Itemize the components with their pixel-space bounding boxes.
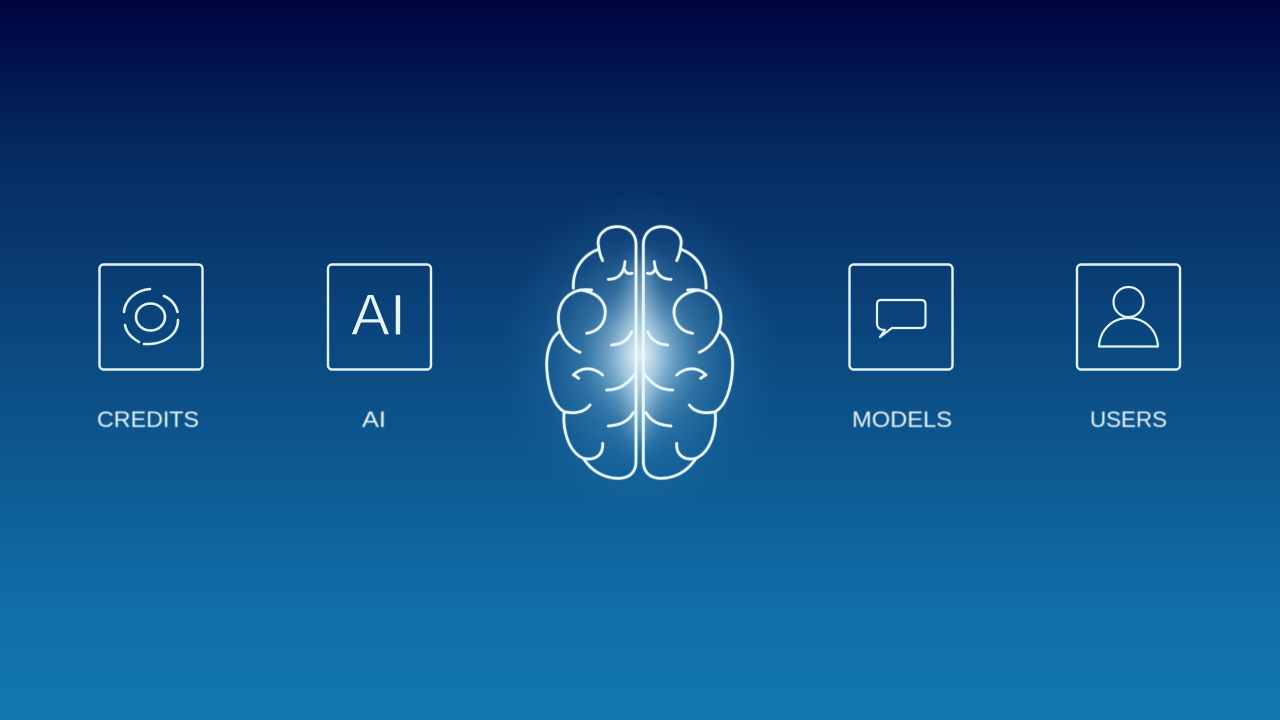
label: ai: AI — [362, 407, 386, 432]
right hemisphere — [643, 227, 733, 478]
label: users: USERS — [1090, 407, 1167, 432]
panel: credits — [97, 264, 202, 432]
left hemisphere — [547, 227, 636, 478]
panel: ai — [328, 264, 431, 432]
panel: users — [1077, 264, 1180, 432]
label: credits: CREDITS — [97, 407, 199, 432]
icon: user — [1099, 287, 1158, 346]
icon: glowing brain — [547, 227, 733, 478]
icon box: models — [850, 264, 952, 370]
icon: AI letters: AI — [351, 283, 406, 348]
brain glow — [500, 190, 780, 520]
icon: dashed ring — [124, 289, 178, 344]
icon box: users — [1077, 264, 1180, 370]
icon: speech bubble — [877, 300, 926, 337]
panel: models — [850, 264, 952, 432]
label: models: MODELS — [852, 407, 952, 432]
icon box: credits — [100, 264, 202, 370]
icon box: ai — [328, 264, 431, 370]
